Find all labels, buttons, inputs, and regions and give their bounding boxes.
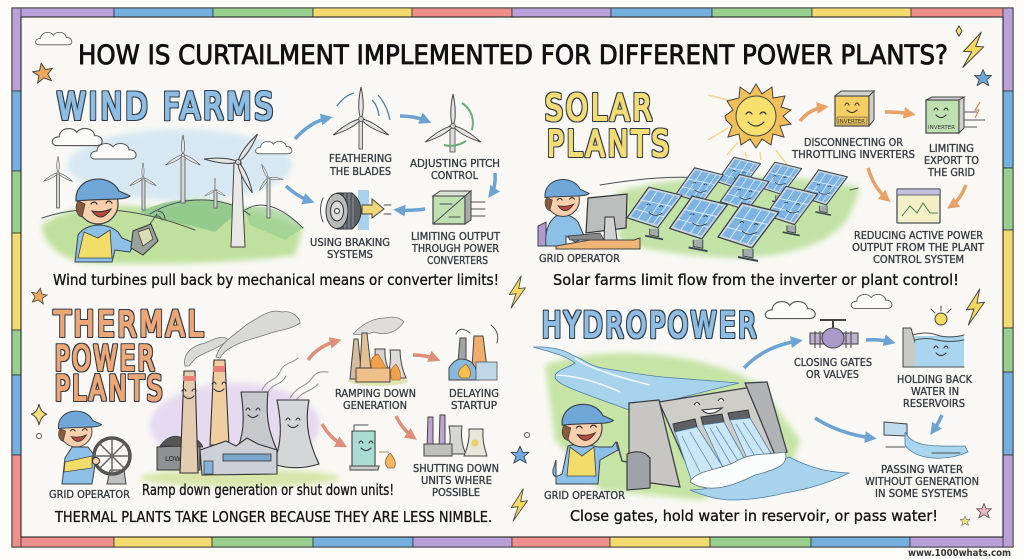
character: wind grid operator with controller [75, 179, 165, 262]
labels: hydro methods: PASSING WATER [881, 463, 963, 476]
labels: hydro methods [544, 356, 979, 502]
heading: solar plants: PLANTS [547, 124, 672, 165]
icon: passing water [884, 422, 968, 458]
website credit: www.1000whats.com [908, 548, 1011, 559]
illustration: thermal plant: LOW [165, 455, 181, 463]
labels: solar methods: DISCONNECTING OR [804, 136, 903, 149]
labels: wind methods: FEATHERING [329, 152, 392, 165]
character: thermal grid operator with wheel [58, 411, 130, 484]
heading: hydropower: HYDROPOWER [542, 306, 759, 346]
illustration: wind farm landscape [42, 117, 303, 264]
labels: wind methods: CONVERTERS [427, 254, 488, 267]
heading: thermal power plants: POWER [55, 339, 157, 379]
labels: thermal methods: STARTUP [451, 399, 497, 412]
arrows: thermal sequence [308, 341, 436, 445]
illustration: solar array [600, 157, 860, 261]
heading: solar plants [545, 88, 672, 165]
labels: solar methods: GRID OPERATOR [539, 252, 620, 265]
labels: thermal methods: RAMPING DOWN [335, 387, 416, 400]
heading: solar plants: SOLAR [545, 88, 655, 129]
icon: reservoir [903, 306, 964, 367]
icon: valve [765, 294, 892, 348]
labels: solar methods: THROTTLING INVERTERS [791, 148, 915, 161]
caption: hydro: Close gates, hold water in reservoir, or pass water! [570, 507, 938, 525]
icon: ramping down plant [348, 317, 408, 386]
labels: solar methods [539, 136, 984, 266]
icon: inverter two [926, 97, 985, 133]
labels: solar methods: LIMITING [929, 142, 974, 155]
labels: thermal methods [49, 387, 499, 501]
character: hydro grid operator with crank [553, 404, 650, 490]
labels: wind methods: THE BLADES [329, 165, 391, 178]
labels: thermal methods: POSSIBLE [432, 486, 480, 499]
labels: hydro methods: CLOSING GATES [794, 356, 872, 369]
arrows: solar sequence [800, 107, 966, 206]
icon: standby cabinet and flame [350, 425, 395, 470]
character: solar grid operator at computer [538, 180, 640, 249]
labels: solar methods: THE GRID [927, 166, 975, 179]
icon: shutting down units [424, 415, 487, 456]
icon: inverter two: INVERTER [928, 125, 955, 131]
labels: wind methods [310, 152, 500, 267]
arrows: wind sequence [286, 116, 495, 210]
labels: hydro methods: RESERVOIRS [903, 397, 965, 410]
caption: thermal takeaway: THERMAL PLANTS TAKE LONGER BECAUSE THEY ARE LESS NIMBLE. [54, 508, 492, 526]
caption: ramp down: Ramp down generation or shut down units! [142, 481, 394, 499]
arrows: hydro sequence [744, 340, 942, 438]
labels: hydro methods: IN SOME SYSTEMS [875, 487, 968, 500]
labels: solar methods: REDUCING ACTIVE POWER [854, 229, 983, 242]
caption: wind: Wind turbines pull back by mechanical means or converter limits! [53, 271, 499, 289]
labels: thermal methods: GRID OPERATOR [49, 488, 130, 501]
panel: hydropower [533, 294, 979, 525]
labels: solar methods: OUTPUT FROM THE PLANT [852, 241, 984, 254]
icon: power converter [433, 191, 485, 224]
panel: thermal power plants [49, 305, 499, 526]
panel: wind farms [42, 85, 500, 289]
icon: inverter one: INVERTER [838, 119, 865, 125]
heading: thermal power plants: PLANTS [55, 369, 165, 409]
icon: braking system [320, 190, 391, 230]
labels: thermal methods: SHUTTING DOWN [413, 462, 499, 475]
labels: wind methods: THROUGH POWER [411, 242, 499, 255]
labels: thermal methods: UNITS WHERE [421, 474, 492, 487]
labels: hydro methods: OR VALVES [806, 368, 859, 381]
heading: wind farms: WIND FARMS [57, 85, 276, 128]
labels: thermal methods: GENERATION [343, 399, 407, 412]
labels: wind methods: SYSTEMS [327, 248, 373, 261]
labels: hydro methods: WITHOUT GENERATION [865, 475, 979, 488]
illustration: river and dam [533, 347, 849, 500]
labels: hydro methods: GRID OPERATOR [544, 489, 625, 502]
heading: thermal power plants: THERMAL [53, 305, 206, 345]
icon: pitch control turbine [424, 94, 482, 152]
icon: delaying startup [449, 325, 498, 380]
labels: wind methods: ADJUSTING PITCH [410, 157, 500, 170]
icon: feathering turbine [332, 87, 390, 149]
labels: solar methods: CONTROL SYSTEM [873, 253, 964, 266]
labels: hydro methods: HOLDING BACK [897, 373, 973, 386]
caption: solar: Solar farms limit flow from the inverter or plant control! [553, 271, 959, 289]
icon: inverter one [835, 91, 874, 126]
labels: wind methods: LIMITING OUTPUT [411, 230, 500, 243]
illustration: thermal plant [140, 311, 340, 487]
labels: wind methods: CONTROL [431, 169, 479, 182]
labels: wind methods: USING BRAKING [310, 236, 390, 249]
icon: control system chart [897, 189, 940, 223]
heading: thermal power plants [53, 305, 206, 409]
panel: solar plants [538, 84, 985, 289]
labels: thermal methods: DELAYING [449, 387, 499, 400]
icon: smiling sun [708, 84, 791, 165]
labels: hydro methods: WATER IN [911, 385, 959, 398]
labels: solar methods: EXPORT TO [924, 154, 979, 167]
title: HOW IS CURTAILMENT IMPLEMENTED FOR DIFFERENT POWER PLANTS? [78, 40, 948, 71]
